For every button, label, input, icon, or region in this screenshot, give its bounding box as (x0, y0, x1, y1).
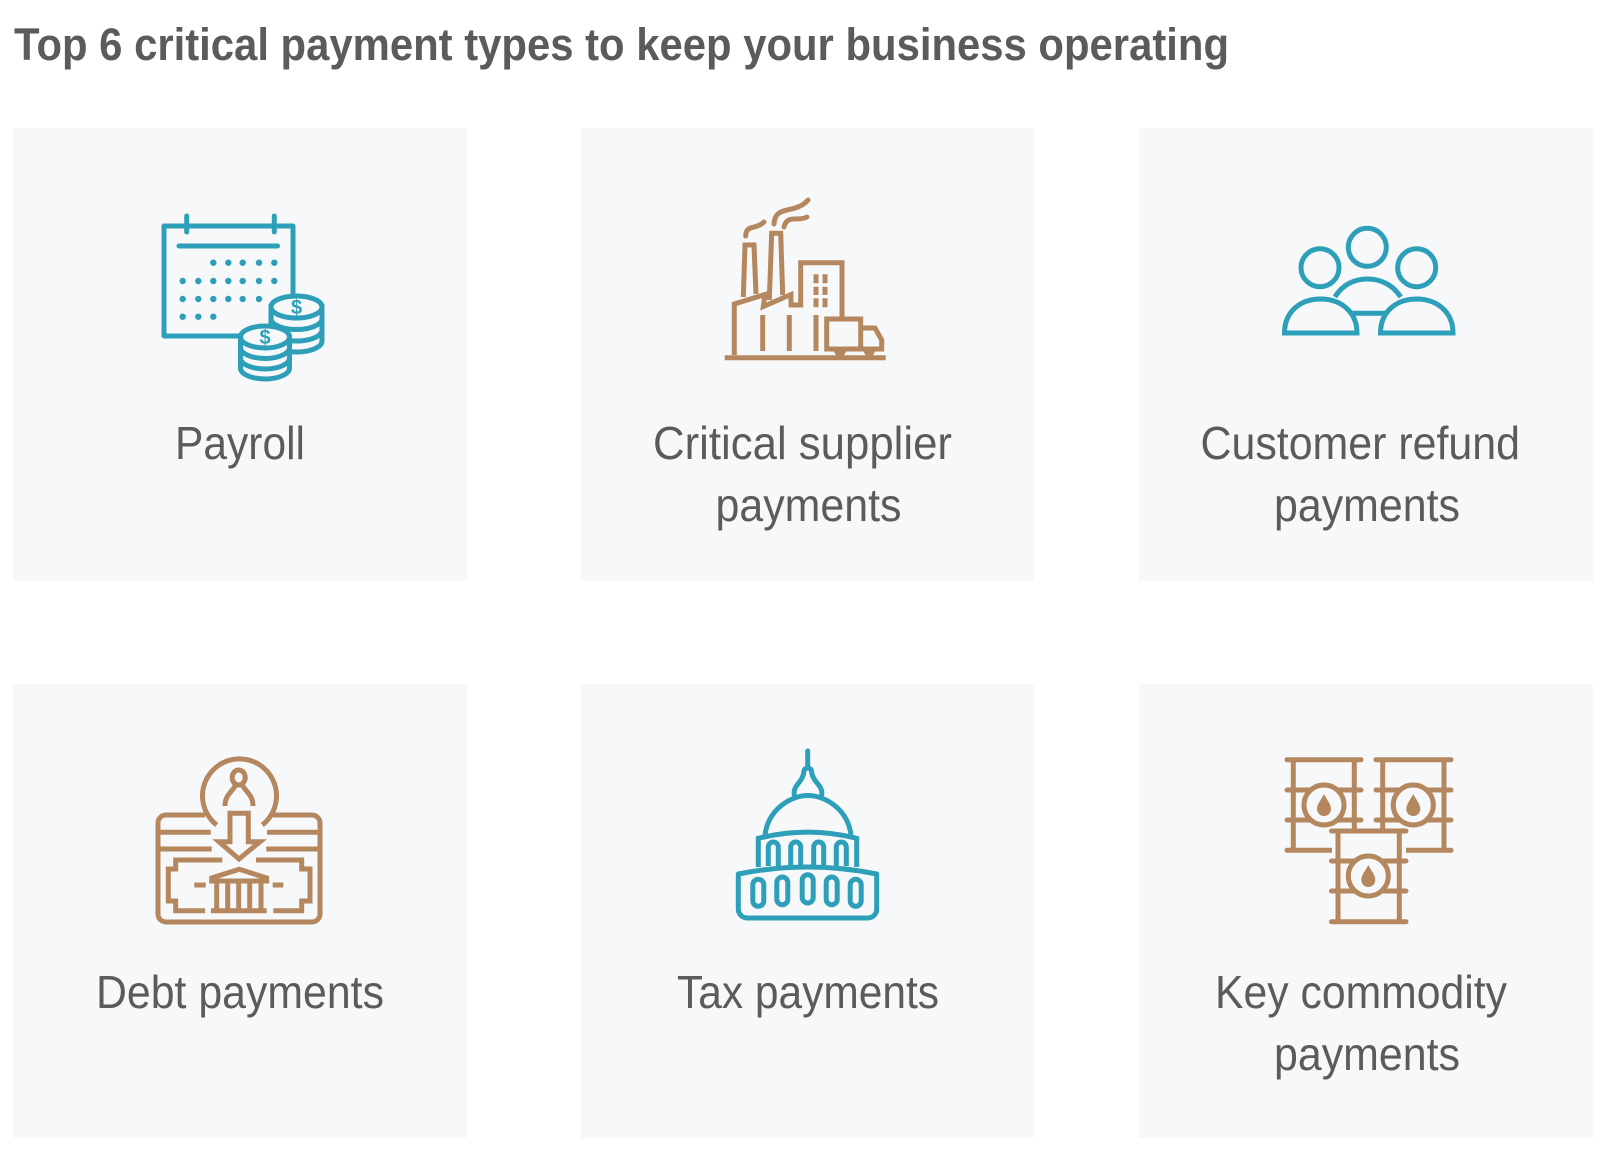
label: critical supplier payments: payments (716, 479, 902, 531)
icon: debt to bank (158, 759, 320, 922)
label: key commodity payments (1215, 966, 1507, 1080)
front coin stack: $ (259, 327, 271, 349)
truck (827, 319, 882, 357)
icon: factory with truck (725, 200, 886, 358)
label: key commodity payments: Key commodity (1215, 966, 1507, 1018)
label: critical supplier payments: Critical supplier (653, 417, 952, 469)
panel: payroll (13, 128, 467, 581)
label: customer refund payments: payments (1274, 479, 1460, 531)
barrel front (1332, 829, 1406, 923)
panel: debt payments (13, 684, 467, 1138)
icon: oil barrels (1287, 760, 1451, 923)
icon: group of people (1284, 228, 1453, 333)
panel: customer refund payments (1139, 128, 1593, 581)
icon: calendar with coins (164, 216, 322, 379)
barrel right (1376, 760, 1451, 850)
title: Top 6 critical payment types to keep your business operating (14, 19, 1229, 70)
label: payroll: Payroll (175, 417, 305, 469)
label: customer refund payments: Customer refund (1200, 417, 1520, 469)
icon: capitol dome (738, 751, 877, 918)
barrel left (1287, 760, 1361, 850)
back coin stack: $ (291, 297, 302, 319)
label: key commodity payments: payments (1274, 1028, 1460, 1080)
label: tax payments: Tax payments (677, 966, 939, 1018)
back coin stack (271, 296, 322, 352)
label: critical supplier payments (653, 417, 952, 531)
panel: tax payments (580, 684, 1034, 1138)
panel: key commodity payments (1139, 684, 1593, 1138)
label: debt payments: Debt payments (96, 966, 384, 1018)
label: customer refund payments (1200, 417, 1520, 531)
panel: critical supplier payments (580, 128, 1034, 581)
front coin stack (240, 326, 290, 379)
